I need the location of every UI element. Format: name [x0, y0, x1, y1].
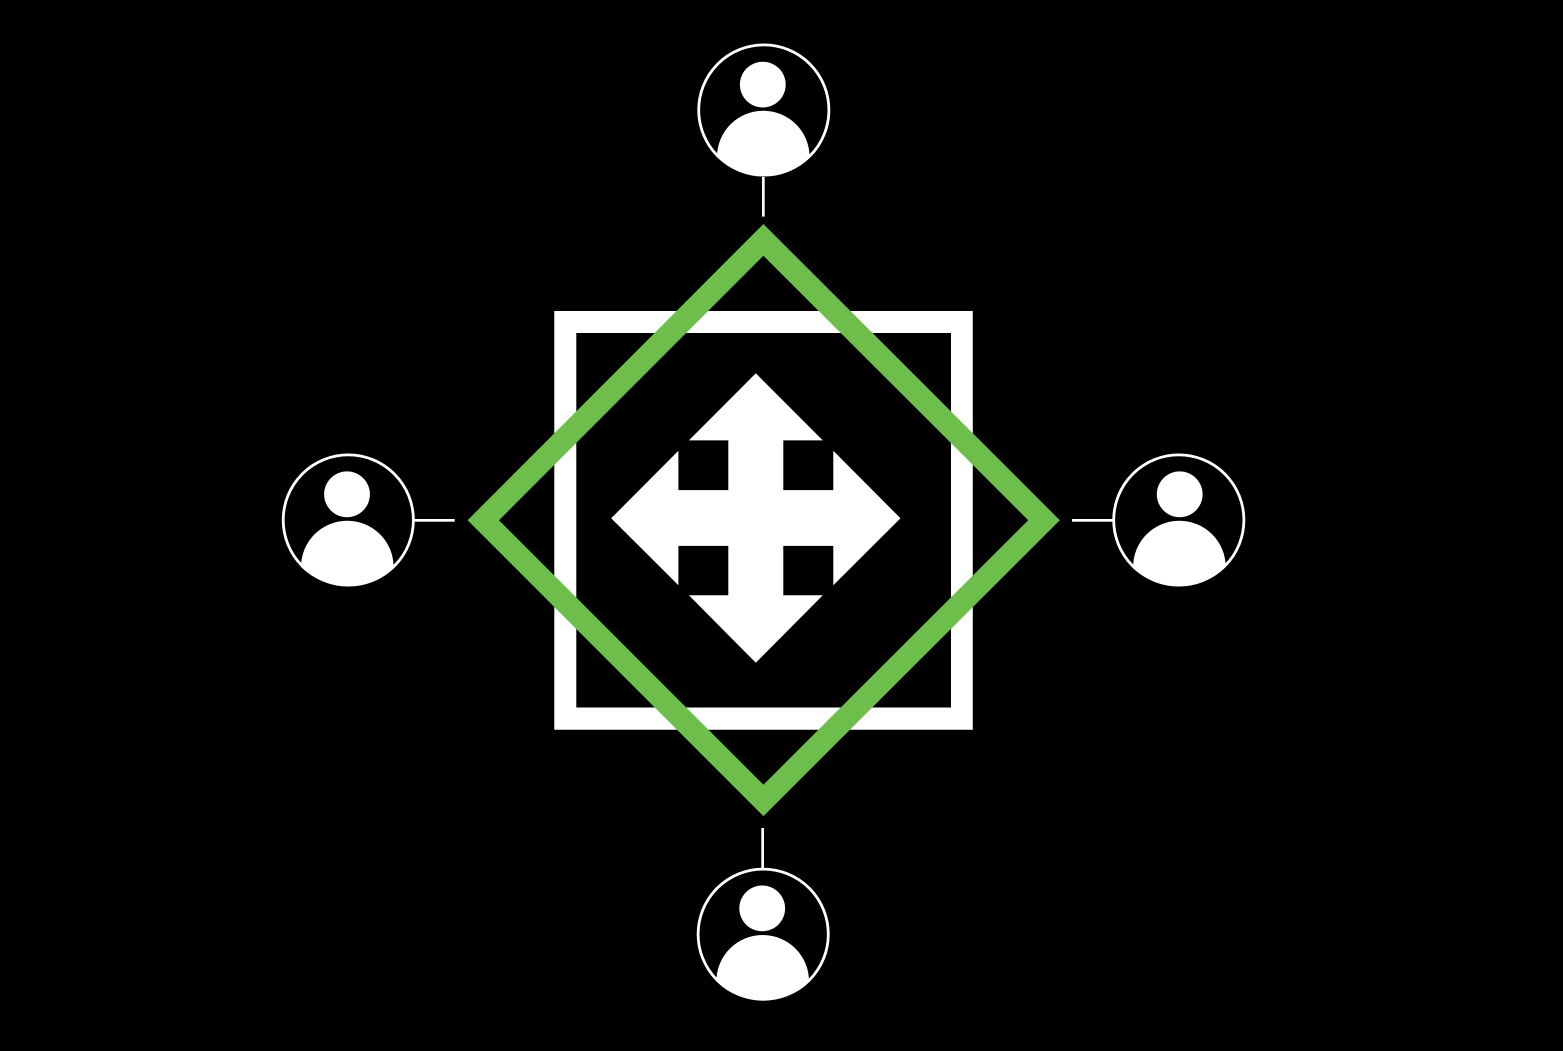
green diamond frame — [468, 224, 1060, 816]
connector: top — [762, 177, 765, 217]
connector: left — [414, 519, 455, 522]
connector: bottom — [761, 828, 764, 868]
white square frame — [554, 311, 973, 730]
icon: person top — [699, 45, 829, 176]
icon: person bottom — [698, 869, 828, 1000]
connector: right — [1072, 519, 1113, 522]
icon: person left — [283, 455, 413, 586]
icon: four-way move arrow — [611, 373, 900, 663]
icon: person right — [1114, 455, 1244, 586]
